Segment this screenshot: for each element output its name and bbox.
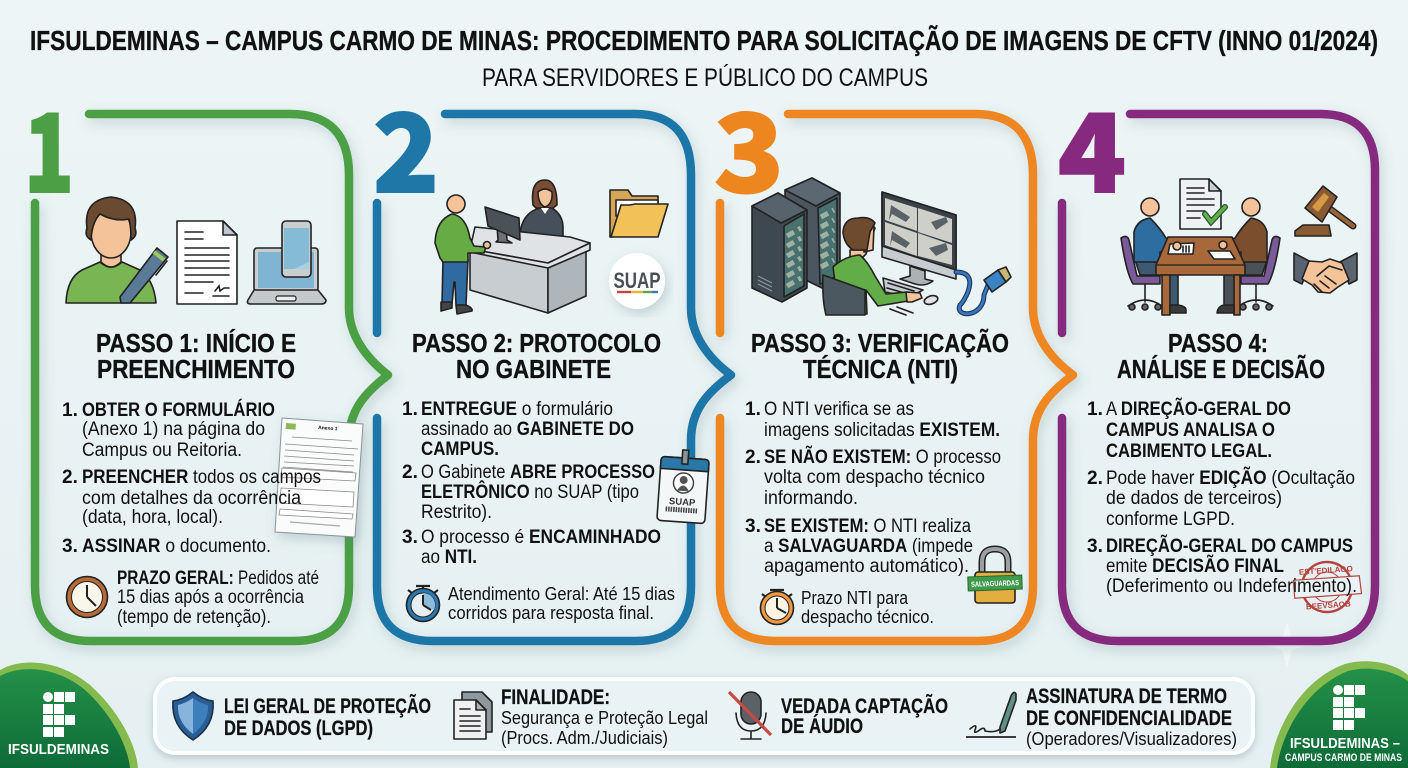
text: confidentiality term bbox=[1026, 685, 1237, 749]
text: LGPD: LEI GERAL DE PROTEÇÃO bbox=[224, 695, 431, 718]
panel: step 3 bbox=[714, 68, 1073, 641]
text block: step 2 list: Restrito). bbox=[421, 502, 492, 523]
text block: step 4 list: conforme LGPD. bbox=[1106, 509, 1235, 530]
text block: step 2 list: 3. bbox=[402, 527, 418, 548]
icon: wall clock bbox=[66, 576, 108, 618]
icon: padlock: SALVAGUARDAS bbox=[971, 578, 1019, 589]
text block: step 1 list: 3. bbox=[62, 536, 78, 557]
panel: step 1 bbox=[24, 68, 388, 641]
heading: step 1: PASSO 1: INÍCIO E bbox=[96, 329, 296, 358]
logo: IFSULDEMINAS Campus Carmo de Minas right bbox=[1270, 661, 1408, 768]
text block: step 3 list: volta com despacho técnico bbox=[764, 467, 985, 488]
text block: step 1 list: com detalhes da ocorrência bbox=[82, 488, 301, 509]
image: Annex 1 form: Anexo 1 bbox=[318, 425, 338, 432]
icon: review stamp bbox=[1292, 560, 1363, 614]
note: general service time: corridos para resposta final. bbox=[448, 603, 654, 623]
text block: step 3 list: 2. bbox=[745, 447, 761, 468]
text block: step 4 list bbox=[1087, 398, 1355, 577]
heading: step 4 bbox=[1117, 330, 1325, 384]
text: audio capture prohibited: DE ÁUDIO bbox=[781, 715, 863, 738]
text block: step 3 list: apagamento automático). bbox=[764, 556, 969, 577]
text: confidentiality term: DE CONFIDENCIALIDADE bbox=[1026, 707, 1232, 730]
text block: step 3 list: SE NÃO EXISTEM: O processo bbox=[764, 446, 1001, 468]
panel 4 outline bbox=[1062, 114, 1375, 641]
note: general deadline: PRAZO GERAL: Pedidos até bbox=[117, 568, 319, 589]
icon: ID badge: SUAP bbox=[669, 496, 696, 509]
text block: step 2 list bbox=[402, 399, 661, 568]
text block: step 2 list: assinado ao GABINETE DO bbox=[421, 419, 634, 440]
logo: IFSULDEMINAS left: IFSULDEMINAS bbox=[8, 741, 109, 758]
text block: step 3 list: imagens solicitadas EXISTEM. bbox=[764, 420, 1000, 441]
subtitle: PARA SERVIDORES E PÚBLICO DO CAMPUS bbox=[482, 63, 928, 92]
number 4: 4 bbox=[1058, 68, 1126, 224]
icon: SUAP badge: SUAP bbox=[614, 268, 660, 293]
panel: step 2 bbox=[373, 68, 731, 641]
icon: signed document bbox=[177, 221, 237, 304]
panel 2 outline bbox=[377, 114, 731, 641]
icon: muted microphone bbox=[729, 692, 771, 739]
panel: step 4 bbox=[1058, 68, 1375, 641]
text block: step 1 list: Campus ou Reitoria. bbox=[82, 440, 242, 461]
heading: step 1: PREENCHIMENTO bbox=[97, 356, 295, 384]
text block: step 1 list: 1. bbox=[62, 400, 78, 421]
text block: step 1 list: PREENCHER todos os campos bbox=[82, 467, 321, 488]
text block: step 2 list: ELETRÔNICO no SUAP (tipo bbox=[421, 481, 639, 503]
heading: step 1 bbox=[96, 329, 296, 384]
illustration: person signing bbox=[66, 197, 168, 303]
text: purpose: Segurança e Proteção Legal bbox=[501, 708, 708, 728]
icon: laptop and phone bbox=[247, 221, 326, 304]
text block: step 4 list: DIREÇÃO-GERAL DO CAMPUS bbox=[1106, 535, 1353, 557]
text: confidentiality term: (Operadores/Visualizadores) bbox=[1026, 729, 1237, 749]
icon: SUAP badge bbox=[609, 253, 665, 309]
panel 3 outline bbox=[720, 114, 1073, 641]
text block: step 4 list: 2. bbox=[1087, 468, 1103, 489]
text block: step 1 list: ASSINAR o documento. bbox=[82, 536, 271, 557]
text: audio capture prohibited bbox=[781, 695, 948, 738]
text block: step 1 list: 2. bbox=[62, 467, 78, 488]
icon: LGPD shield bbox=[173, 692, 213, 740]
logo: IFSULDEMINAS left bbox=[0, 662, 138, 768]
note: general deadline: (tempo de retenção). bbox=[117, 607, 271, 628]
text block: step 2 list: ENTREGUE o formulário bbox=[421, 399, 613, 420]
text block: step 3 list: SE EXISTEM: O NTI realiza bbox=[764, 516, 971, 537]
note: general deadline bbox=[117, 568, 319, 628]
note: general service time: Atendimento Geral: Até 15 dias bbox=[448, 584, 675, 604]
text block: step 3 list: 3. bbox=[745, 516, 761, 537]
text: confidentiality term: ASSINATURA DE TERMO bbox=[1026, 685, 1227, 708]
text block: step 4 list: de dados de terceiros) bbox=[1106, 488, 1282, 509]
note: NTI deadline bbox=[801, 588, 934, 627]
footer bar bbox=[155, 679, 1253, 753]
text: audio capture prohibited: VEDADA CAPTAÇÃO bbox=[781, 695, 948, 718]
text block: step 4 list: CAMPUS ANALISA O bbox=[1106, 420, 1275, 441]
text block: step 2 list: O processo é ENCAMINHADO bbox=[421, 527, 661, 548]
heading: step 3 bbox=[751, 328, 1009, 384]
illustration: NTI technician with servers bbox=[752, 178, 1011, 315]
text block: step 2 list: 1. bbox=[402, 399, 418, 420]
icon: pen signature bbox=[966, 692, 1016, 737]
text: purpose: (Procs. Adm./Judiciais) bbox=[501, 728, 668, 748]
text block: step 1 list bbox=[62, 399, 321, 557]
icon: stopwatch blue bbox=[406, 586, 440, 622]
step 4 last line: (Deferimento ou Indeferimento). bbox=[1106, 576, 1357, 597]
heading: step 3: TÉCNICA (NTI) bbox=[803, 355, 958, 384]
image: Annex 1 form bbox=[275, 418, 363, 537]
text block: step 3 list bbox=[745, 399, 1001, 577]
text block: step 2 list: CAMPUS. bbox=[421, 439, 499, 460]
text: purpose: FINALIDADE: bbox=[501, 686, 610, 709]
text block: step 1 list: OBTER O FORMULÁRIO bbox=[82, 399, 275, 421]
text: purpose bbox=[501, 686, 708, 748]
icon: review stamp: EST'EDILAGO bbox=[1299, 564, 1353, 577]
text block: step 3 list: informando. bbox=[764, 488, 858, 509]
icon: stopwatch orange bbox=[760, 590, 794, 624]
text block: step 4 list: CABIMENTO LEGAL. bbox=[1106, 441, 1272, 462]
panel 1 outline bbox=[35, 114, 388, 641]
icon: padlock bbox=[968, 549, 1022, 603]
number 1: 1 bbox=[24, 68, 74, 224]
text block: step 2 list: 2. bbox=[402, 462, 418, 483]
text block: step 4 list: A DIREÇÃO-GERAL DO bbox=[1106, 398, 1291, 420]
illustration: reception desk bbox=[435, 180, 590, 314]
heading: step 2: NO GABINETE bbox=[456, 356, 611, 384]
text block: step 3 list: a SALVAGUARDA (impede bbox=[764, 536, 973, 557]
icon: gavel bbox=[1295, 186, 1353, 236]
note: NTI deadline: Prazo NTI para bbox=[801, 588, 909, 608]
note: general service time bbox=[448, 584, 675, 623]
text block: step 2 list: ao NTI. bbox=[421, 547, 477, 568]
text block: step 2 list: O Gabinete ABRE PROCESSO bbox=[421, 462, 655, 483]
number 3: 3 bbox=[714, 68, 784, 224]
text block: step 4 list: emite DECISÃO FINAL bbox=[1106, 555, 1284, 577]
text block: step 4 list: 1. bbox=[1087, 399, 1103, 420]
text block: step 3 list: 1. bbox=[745, 399, 761, 420]
icon: folder bbox=[610, 190, 668, 237]
text block: step 4 list: 3. bbox=[1087, 536, 1103, 557]
note: general deadline: 15 dias após a ocorrência bbox=[117, 587, 304, 608]
heading: step 3: PASSO 3: VERIFICAÇÃO bbox=[751, 328, 1009, 358]
text block: step 4 list: Pode haver EDIÇÃO (Ocultação bbox=[1106, 467, 1355, 489]
heading: step 4: PASSO 4: bbox=[1168, 330, 1268, 358]
illustration: meeting at table bbox=[1121, 179, 1280, 315]
text: LGPD: DE DADOS (LGPD) bbox=[224, 717, 373, 740]
note: NTI deadline: despacho técnico. bbox=[801, 607, 934, 627]
icon: handshake bbox=[1294, 253, 1357, 293]
icon: review stamp: BEEVSAOB bbox=[1306, 599, 1351, 612]
text block: step 3 list: O NTI verifica se as bbox=[764, 399, 914, 420]
icon: ID badge bbox=[657, 448, 710, 524]
heading: step 4: ANÁLISE E DECISÃO bbox=[1117, 354, 1325, 384]
text block: step 1 list: (data, hora, local). bbox=[82, 507, 223, 528]
heading: step 2 bbox=[412, 330, 661, 384]
heading: step 2: PASSO 2: PROTOCOLO bbox=[412, 330, 661, 358]
icon: documents bbox=[454, 692, 492, 739]
number 2: 2 bbox=[373, 68, 439, 224]
text: LGPD bbox=[224, 695, 431, 740]
text block: step 1 list: (Anexo 1) na página do bbox=[82, 419, 265, 440]
